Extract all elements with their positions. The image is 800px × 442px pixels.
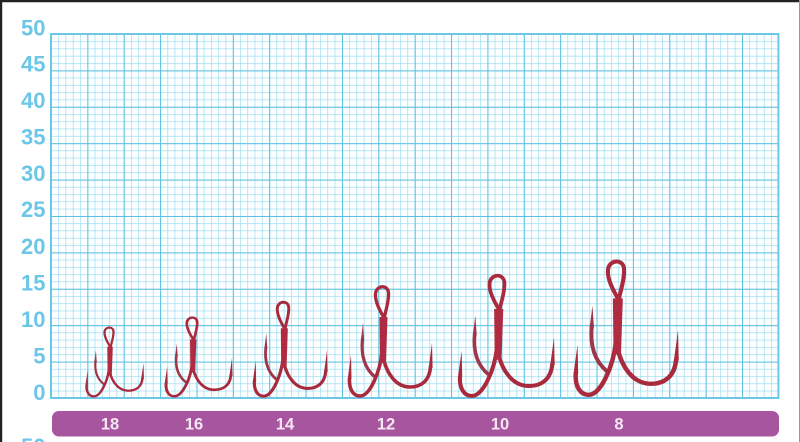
- hook: size 12: [348, 287, 433, 396]
- y axis scale labels: 45: [21, 52, 46, 76]
- size label bar: 10: [491, 416, 509, 434]
- y axis scale labels: 20: [21, 234, 46, 259]
- size label bar: 16: [185, 416, 203, 434]
- hook: size 16: [165, 318, 232, 396]
- size label bar: 14: [276, 416, 295, 434]
- hook: size 10: [458, 276, 555, 396]
- hook: size 14: [253, 302, 328, 396]
- y axis scale labels: 35: [21, 124, 46, 150]
- y axis scale labels: [21, 16, 46, 405]
- y axis scale labels: 15: [21, 270, 46, 296]
- y axis scale labels: 0: [33, 380, 46, 405]
- size label bar: 8: [614, 416, 624, 434]
- size label bar: 18: [101, 416, 119, 434]
- y axis scale labels: 30: [21, 161, 46, 186]
- y axis scale labels: 25: [21, 197, 46, 222]
- y axis scale labels: 40: [21, 88, 46, 113]
- size label bar: 12: [377, 416, 395, 434]
- y axis scale labels: 5: [33, 344, 46, 368]
- hook: size 18: [85, 328, 144, 396]
- size label bar: [52, 411, 779, 436]
- y axis scale labels: 10: [21, 307, 46, 332]
- hook: size 8: [573, 261, 679, 395]
- y axis scale labels: 50: [21, 16, 46, 40]
- graph paper grid: [51, 34, 778, 398]
